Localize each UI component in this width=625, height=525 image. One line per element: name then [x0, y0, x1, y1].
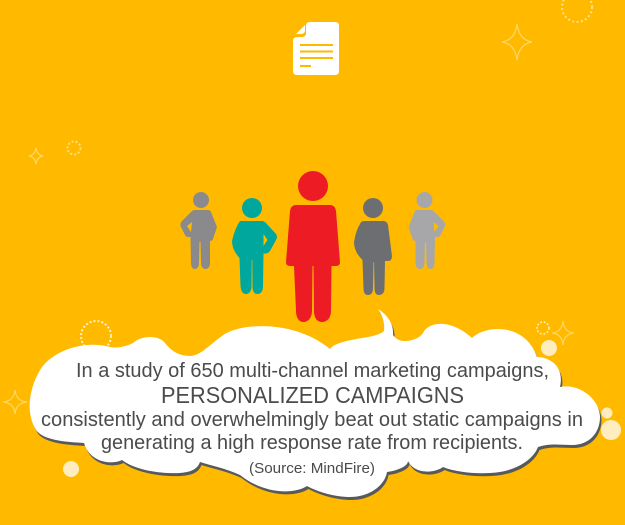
cloud shadow — [31, 312, 602, 500]
cloud body — [30, 309, 600, 497]
person: teal — [232, 198, 277, 294]
person: left gray — [180, 192, 217, 269]
cloud text: consistently and overwhelmingly beat out static campaigns in — [41, 409, 583, 431]
person: right light gray — [408, 192, 445, 269]
cloud text: PERSONALIZED CAMPAIGNS — [161, 382, 464, 408]
speech cloud — [30, 309, 602, 500]
person: dark gray — [354, 198, 392, 295]
person: red center — [286, 171, 340, 322]
cloud text: (Source: MindFire) — [249, 460, 375, 477]
cloud text: In a study of 650 multi-channel marketing campaigns, — [76, 360, 549, 382]
cloud text: generating a high response rate from recipients. — [101, 432, 523, 454]
icon: document — [293, 22, 339, 75]
cloud text — [41, 360, 583, 477]
